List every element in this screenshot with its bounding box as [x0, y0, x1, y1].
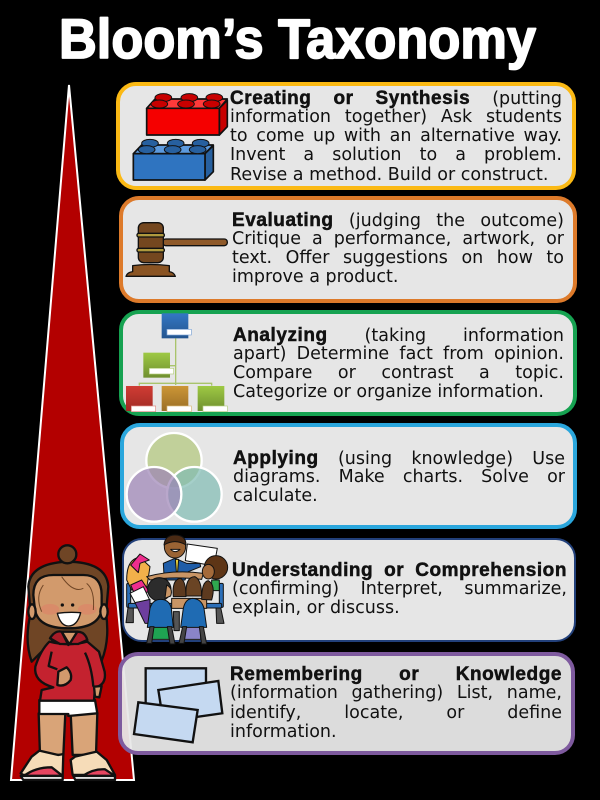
panel: analyzing [119, 310, 577, 416]
panel: creating [116, 82, 576, 190]
title: Bloom’s Taxonomy [59, 7, 536, 70]
text: analyzing: Categorize or organize information. [233, 382, 544, 402]
text: creating or synthesis: Invent a solution to a problem. [230, 145, 562, 165]
text: remembering or knowledge [230, 664, 562, 742]
text: evaluating: Critique a performance, artwork, or [232, 229, 564, 249]
text: understanding or comprehension [232, 560, 567, 618]
text: remembering or knowledge: information. [230, 722, 337, 742]
text: evaluating [232, 210, 564, 287]
text: evaluating: Evaluating (judging the outcome) [232, 210, 564, 230]
text: analyzing: Compare or contrast a topic. [233, 363, 564, 383]
text: analyzing: Analyzing (taking information [233, 324, 564, 346]
text: remembering or knowledge: (information gathering) List, name, [230, 683, 562, 703]
text: remembering or knowledge: Remembering or Knowledge [230, 664, 562, 685]
panel: applying [120, 423, 577, 529]
text: applying [233, 448, 565, 506]
text: remembering or knowledge: identify, locate, or define [230, 703, 562, 723]
text: creating or synthesis: Revise a method. Build or construct. [230, 165, 548, 185]
text: evaluating: improve a product. [232, 267, 398, 287]
panel: evaluating [119, 196, 577, 303]
text: understanding or comprehension: (confirming) Interpret, summarize, [232, 579, 567, 599]
text: understanding or comprehension: explain, or discuss. [232, 598, 400, 618]
text: creating or synthesis [230, 88, 562, 185]
text: applying: diagrams. Make charts. Solve or [233, 467, 565, 487]
text: creating or synthesis: Creating or Synthesis (putting [230, 88, 562, 108]
panel: understanding [122, 538, 576, 642]
text: analyzing [233, 324, 564, 402]
text: creating or synthesis: information together) Ask students [230, 107, 562, 127]
panel: remembering [118, 652, 575, 755]
text: analyzing: apart) Determine fact from opinion. [233, 344, 564, 364]
text: applying: calculate. [233, 486, 318, 506]
text: creating or synthesis: to come up with an alternative way. [230, 126, 562, 146]
text: applying: Applying (using knowledge) Use [233, 448, 565, 468]
text: evaluating: text. Offer suggestions on how to [232, 248, 564, 268]
text: understanding or comprehension: Understanding or Comprehension [232, 560, 567, 580]
